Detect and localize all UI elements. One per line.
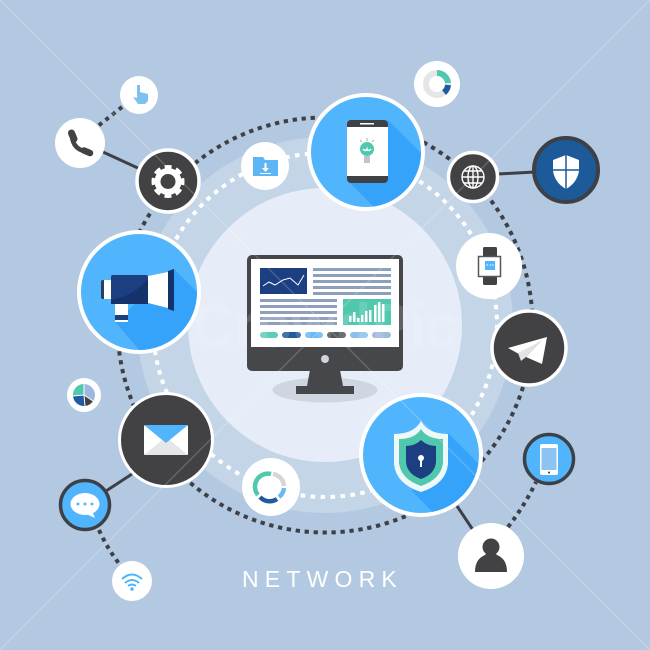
- monitor text lines: [260, 268, 391, 325]
- node: pie chart: [67, 378, 101, 412]
- node: blue shield: [534, 138, 598, 202]
- node: bottom donut chart: [242, 458, 300, 516]
- monitor colour pills: [260, 332, 391, 338]
- node: smartphone with light bulb: [307, 93, 425, 211]
- node: chat bubble: [60, 480, 110, 530]
- title: NETWORK: [242, 566, 403, 592]
- node: person: [458, 523, 524, 589]
- node: pointing hand: [120, 76, 158, 114]
- node: top donut chart: [414, 61, 460, 107]
- node: folder download: [241, 142, 289, 190]
- monitor bar chart: [343, 299, 391, 325]
- node: mail: [120, 394, 212, 486]
- node: smart watch: [456, 233, 522, 299]
- monitor: [247, 255, 403, 402]
- connector lines: [98, 107, 536, 566]
- node: globe: [448, 152, 498, 202]
- node: gear: [137, 150, 199, 212]
- inner white dashed ring: [153, 153, 497, 497]
- node: security shield: [359, 393, 483, 517]
- node: telephone: [55, 118, 105, 168]
- monitor line chart: [260, 268, 307, 294]
- node: megaphone: [77, 230, 201, 354]
- watermark: CrowdPic: [192, 292, 458, 361]
- background rings: [137, 137, 513, 513]
- outer dark dotted ring: [118, 118, 532, 532]
- node: wifi: [112, 561, 152, 601]
- node: mobile: [524, 434, 574, 484]
- node: paper plane: [492, 311, 566, 385]
